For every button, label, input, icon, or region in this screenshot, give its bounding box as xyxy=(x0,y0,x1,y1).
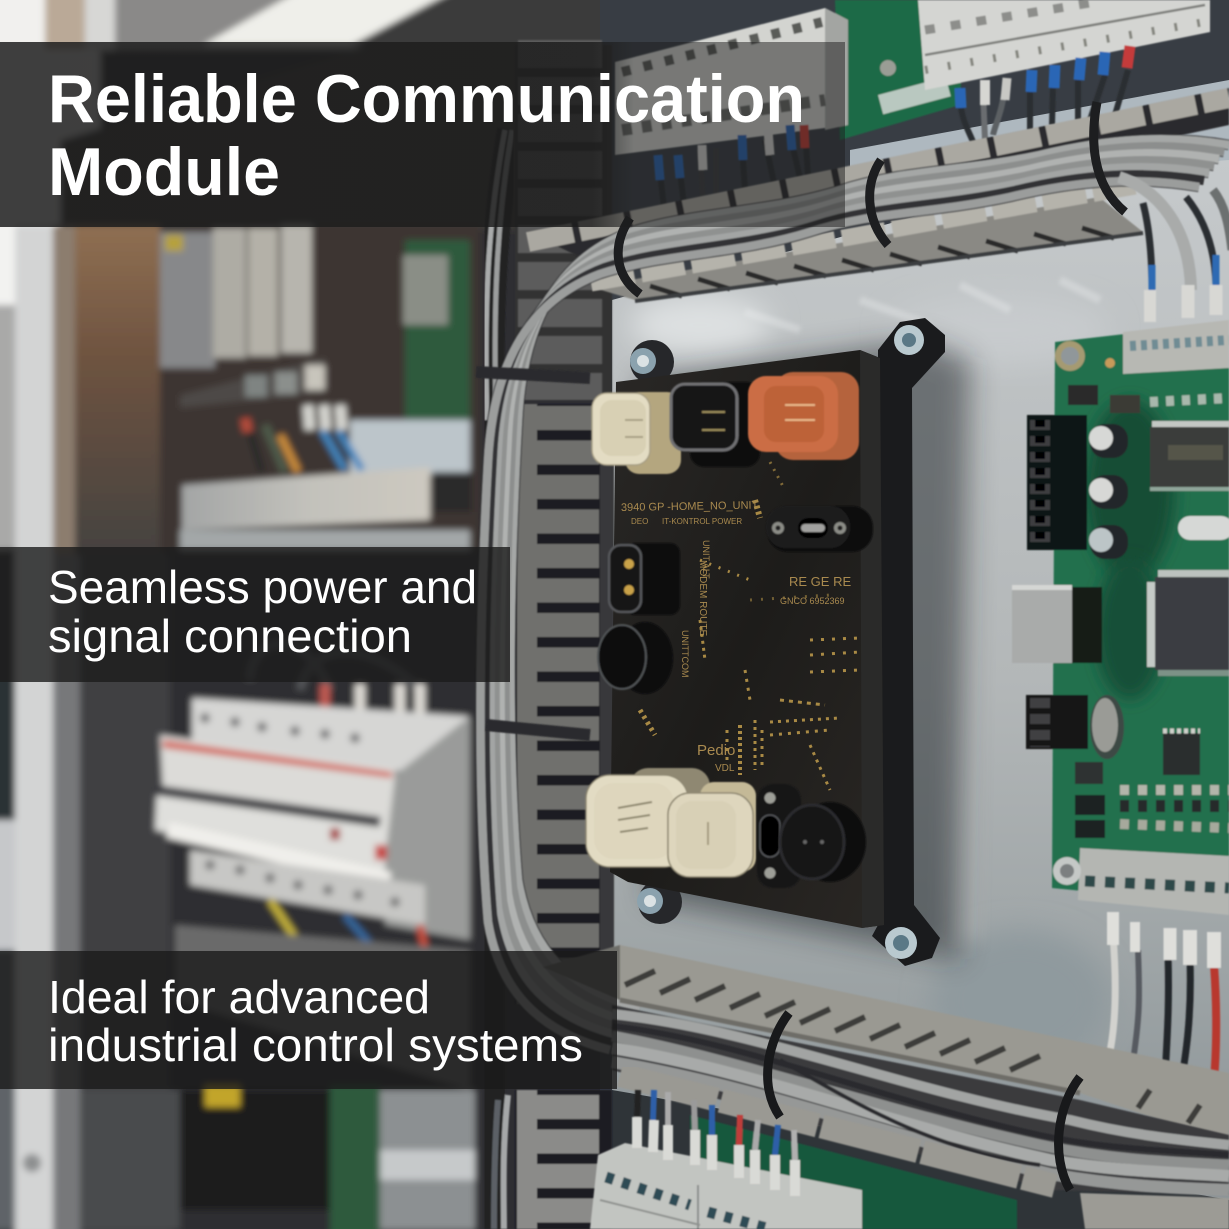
title: Reliable Communication xyxy=(48,61,805,137)
pcb silkscreen labels: MODEM ROUTE xyxy=(697,560,708,636)
capacitors xyxy=(1089,424,1128,559)
cable ties on top bundle xyxy=(618,102,1125,294)
top electronics xyxy=(615,0,1210,208)
chip lower xyxy=(1147,570,1229,676)
module shadow xyxy=(640,340,970,960)
pcb silkscreen labels: VDL xyxy=(715,763,735,774)
title xyxy=(48,61,805,210)
pcb silkscreen labels: 3940 GP -HOME_NO_UNIT xyxy=(621,500,759,514)
chip upper xyxy=(1150,421,1229,491)
terminal block: upper right xyxy=(1123,320,1229,374)
caption band: power and signal: Seamless power and xyxy=(48,561,477,613)
background: blurred cabinet interior xyxy=(0,0,640,1229)
caption band: industrial control: industrial control systems xyxy=(48,1019,583,1071)
pcb gold traces xyxy=(640,462,860,790)
pcb silkscreen labels: Pedio xyxy=(697,742,735,759)
lower cable bundle xyxy=(612,1005,1229,1195)
upper cable duct combs xyxy=(528,88,1229,262)
silver port xyxy=(1012,585,1102,663)
terminal block and board bottom xyxy=(590,1090,1017,1229)
left comb strip xyxy=(466,235,478,1229)
usb-c port right xyxy=(766,506,873,552)
cream connector top xyxy=(592,392,681,474)
title band xyxy=(0,42,845,227)
pcb silkscreen labels: DEO xyxy=(631,517,648,526)
two pin power connector xyxy=(609,543,680,615)
black bracket xyxy=(872,318,945,966)
pcb cover xyxy=(610,350,884,928)
right side wires to block xyxy=(1119,177,1229,322)
second cream connector xyxy=(668,782,756,877)
pcb silkscreen labels: UNIT ALT xyxy=(701,540,711,579)
caption band: power and signal xyxy=(0,547,510,682)
metal back panel xyxy=(600,0,1229,1229)
lower duct bottom comb xyxy=(620,1075,1229,1229)
vertical cable duct xyxy=(515,40,614,1229)
header connector xyxy=(1027,415,1087,550)
wires top left xyxy=(658,125,808,208)
pcb silkscreen labels xyxy=(621,500,851,774)
pcb silkscreen labels: IT-KONTROL POWER xyxy=(662,517,742,526)
pcb silkscreen labels: RE GE RE xyxy=(789,574,851,589)
communication module xyxy=(586,318,970,966)
upper duct lower comb xyxy=(591,186,1143,301)
round black connector bottom xyxy=(780,802,866,882)
green circuit board xyxy=(1012,320,1229,915)
mounting screws xyxy=(630,340,682,924)
caption band: industrial control: Ideal for advanced xyxy=(48,971,430,1023)
terminal block: lower right xyxy=(1078,848,1229,915)
cable ties on lower bundle xyxy=(768,1013,1080,1190)
caption band: industrial control xyxy=(0,951,617,1089)
pcb silkscreen labels: UNITTCOM xyxy=(680,630,690,678)
blurred modules upper xyxy=(160,225,472,530)
lower cable duct xyxy=(543,945,1229,1143)
lower components xyxy=(1026,695,1229,838)
cable bundle: tray to tray xyxy=(480,139,1229,1050)
blurred breaker xyxy=(155,684,470,940)
black connector top xyxy=(671,382,760,467)
secondary vertical cables xyxy=(486,130,512,1229)
large cream connector xyxy=(586,768,710,867)
pcb silkscreen labels: GNCO 6952369 xyxy=(780,596,845,606)
cable ties on vertical run xyxy=(476,372,590,735)
orange connector xyxy=(748,372,859,460)
round black connector xyxy=(598,622,673,694)
title: Module xyxy=(48,134,280,210)
terminal block: top right xyxy=(918,0,1210,90)
vertical usb-c port xyxy=(757,784,801,888)
wires top right xyxy=(960,46,1130,148)
terminal block: top left xyxy=(615,8,848,155)
lower right wires xyxy=(1100,912,1216,1095)
caption band: power and signal: signal connection xyxy=(48,610,412,662)
